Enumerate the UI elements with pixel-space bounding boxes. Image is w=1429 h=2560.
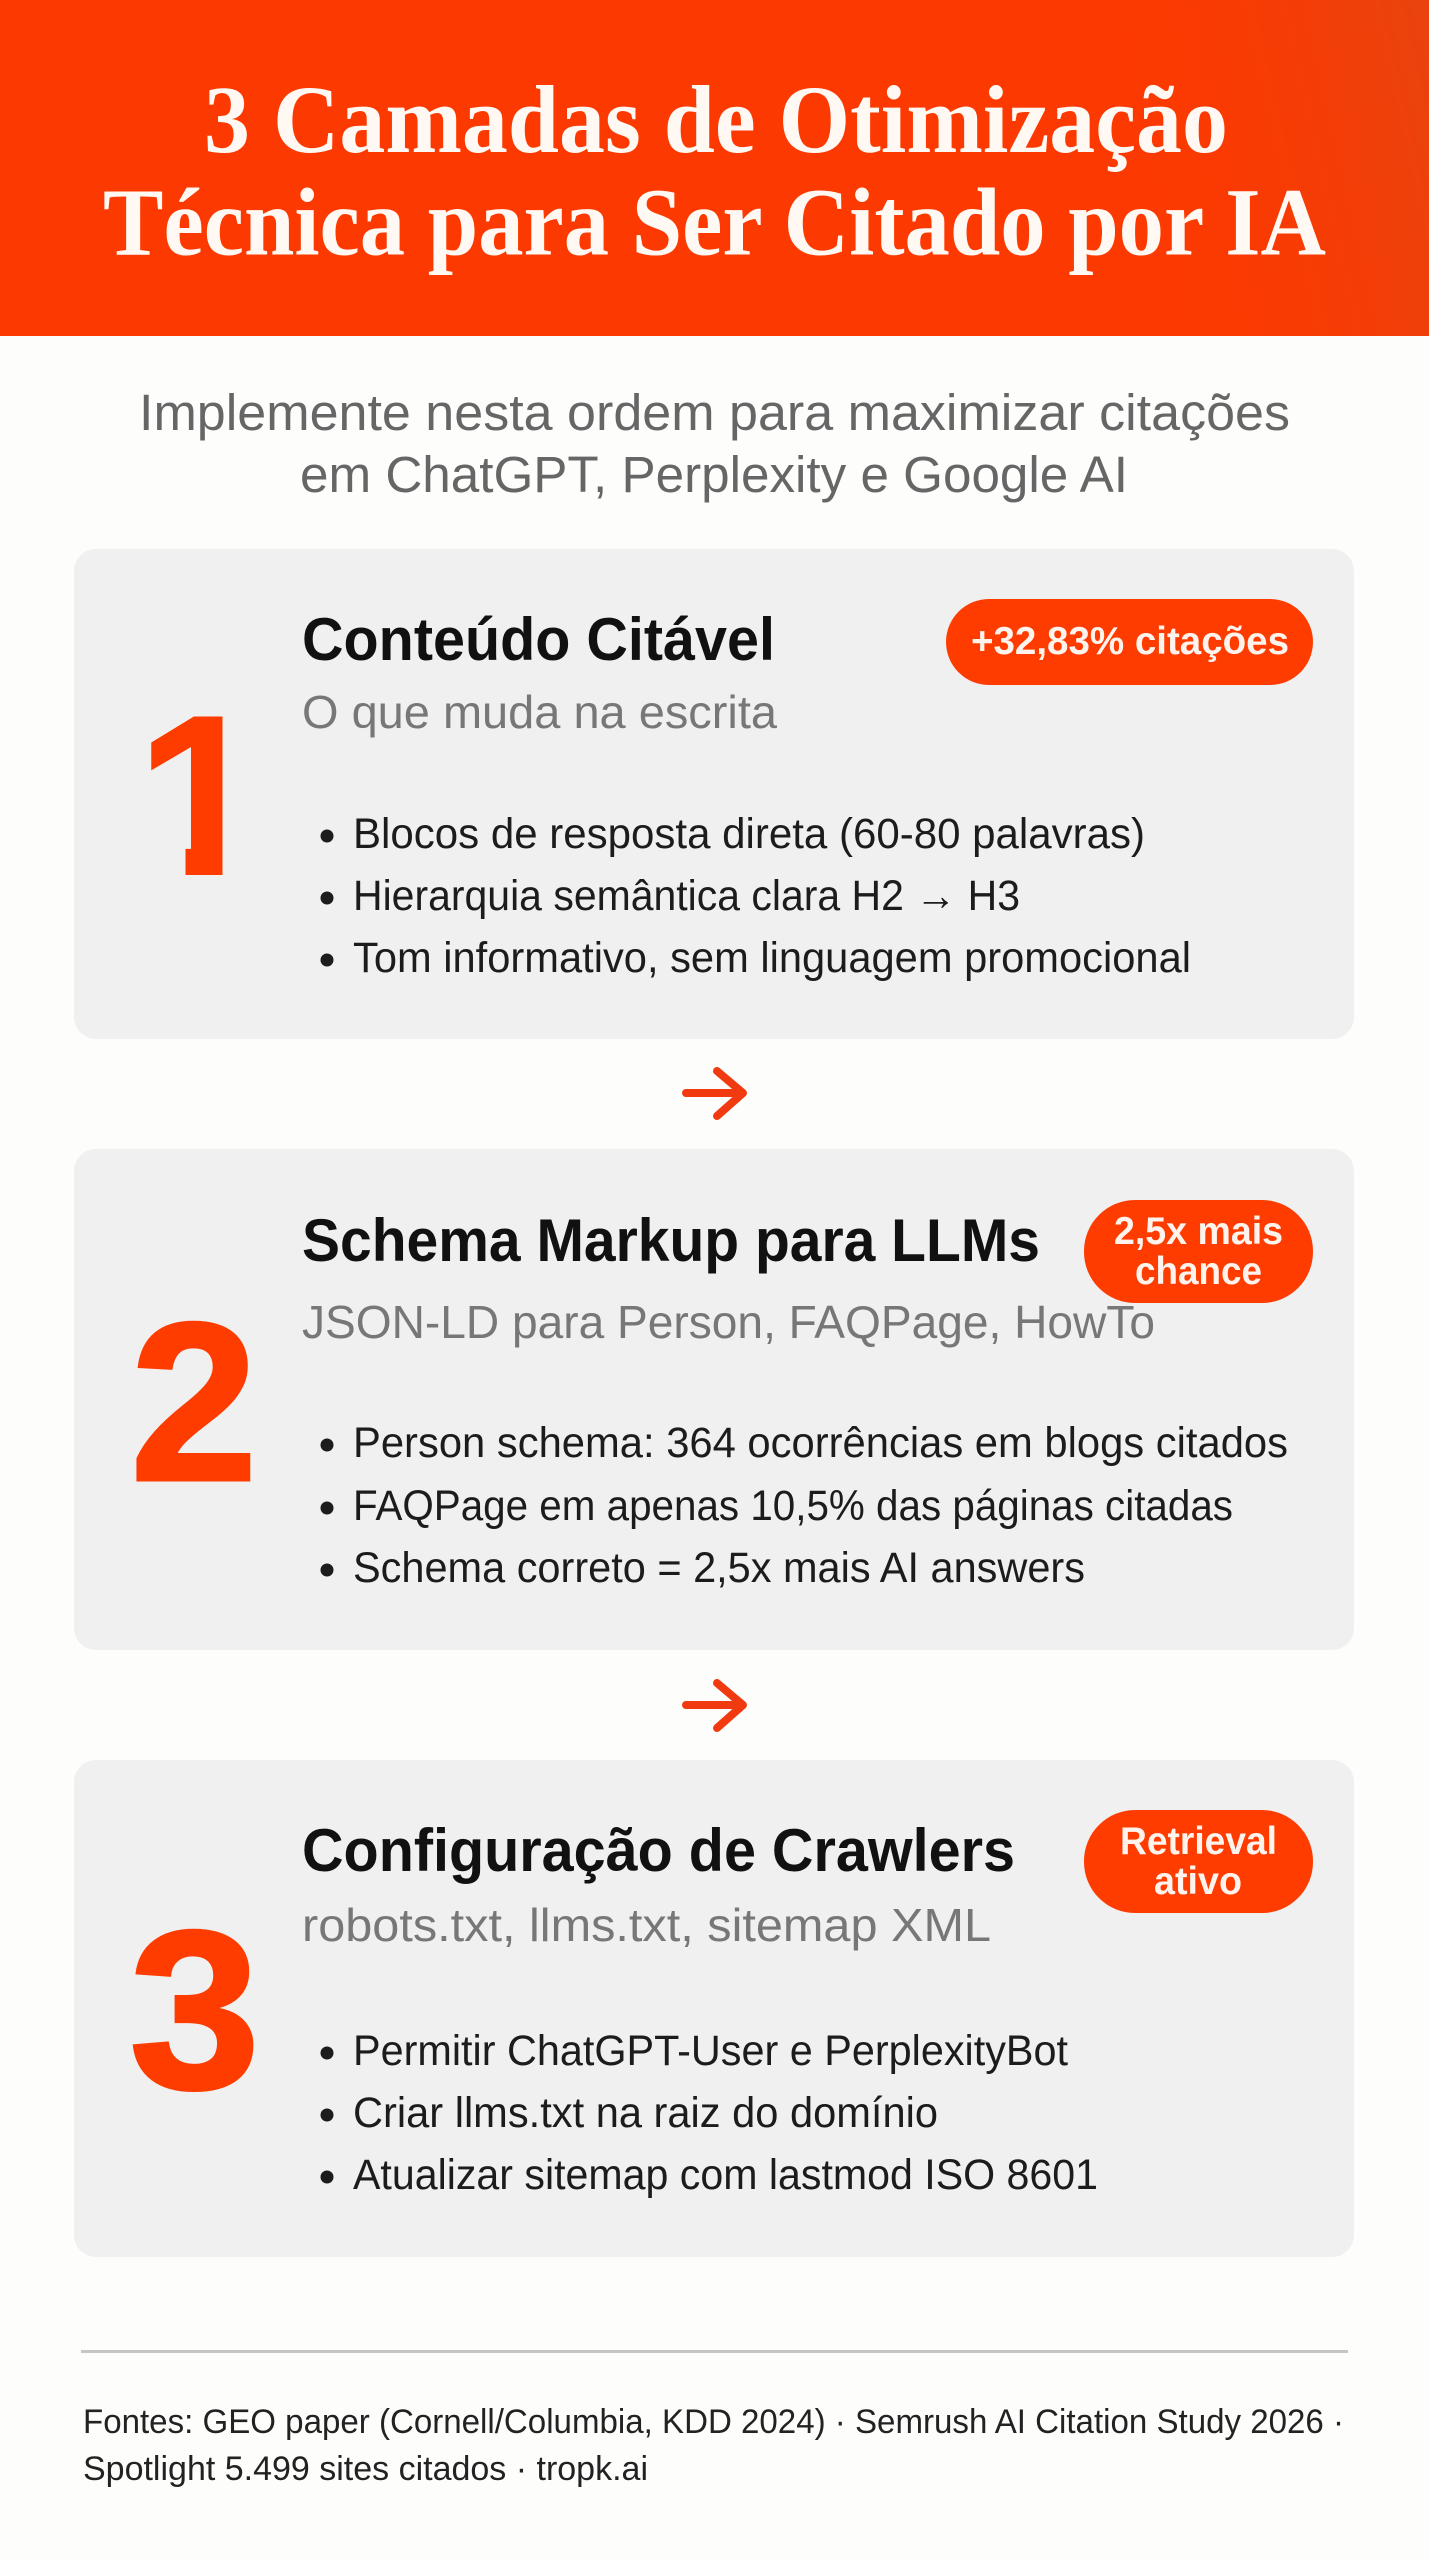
title [103,66,1326,276]
subheading: O que muda na escrita: O que muda na escrita [302,686,777,738]
badge: 2,5x mais chance: 2,5x mais [1114,1210,1283,1253]
heading: Conteúdo Citável: Conteúdo Citável [302,606,775,673]
header banner with title [0,0,1429,336]
arrow 2 to 3 [686,1683,743,1728]
subtitle [139,384,1290,503]
badge: 2,5x mais chance: chance [1135,1250,1262,1293]
subtitle: Implemente nesta ordem para maximizar citações [139,384,1290,441]
panel: card 3 Configuração de Crawlers [74,1760,1354,2257]
badge: +32,83% citações [946,599,1313,685]
subheading: robots.txt: robots.txt, llms.txt, sitemap XML [302,1899,991,1951]
bullet list: Tom informativo, sem linguagem promocional [353,934,1191,982]
badge: Retrieval ativo [1084,1810,1313,1913]
bullet list: Schema correto = 2,5x mais AI answers [353,1544,1085,1592]
badge: Retrieval ativo: ativo [1154,1860,1242,1903]
title: Técnica para Ser Citado por IA [103,168,1326,276]
panel: card 1 Conteúdo Citável [74,549,1354,1039]
footer sources: Spotlight 5.499 sites citados · tropk.ai [83,2450,648,2488]
bullet list [320,1419,1288,1592]
footer sources: Fontes: GEO paper (Cornell/Columbia, KDD 2024) · Semrush AI Citation Study 2026 · [83,2403,1344,2441]
bullet list: Atualizar sitemap com lastmod ISO 8601 [353,2151,1098,2199]
badge: +32,83% citações: +32,83% citações [971,620,1289,663]
panel: card 2 Schema Markup para LLMs [74,1149,1354,1650]
number 3: 3 [129,1884,260,2136]
badge: Retrieval ativo: Retrieval [1120,1820,1277,1863]
footer sources [83,2403,1344,2488]
arrow 1 to 2 [686,1071,743,1116]
bullet list: Hierarquia semântica clara H2 → H3 [353,872,1020,920]
bullet list: FAQPage em apenas 10,5% das páginas citadas [353,1482,1233,1530]
bullet list: Blocos de resposta direta (60-80 palavras) [353,810,1145,858]
heading: Configuração de Crawlers: Configuração de Crawlers [302,1817,1015,1884]
bullet list: Criar llms.txt na raiz do domínio [353,2089,938,2137]
number 1: 1 [136,670,270,922]
subtitle: em ChatGPT, Perplexity e Google AI [300,446,1128,503]
subheading: JSON-LD: JSON-LD para Person, FAQPage, HowTo [302,1296,1155,1348]
bullet list [320,810,1191,982]
title: 3 Camadas de Otimização [204,66,1228,173]
bullet list [320,2027,1098,2199]
number 2: 2 [130,1277,258,1529]
bullet list: Person schema: 364 ocorrências em blogs citados [353,1419,1288,1467]
bullet list: Permitir ChatGPT-User e PerplexityBot [353,2027,1068,2075]
badge: 2,5x mais chance [1084,1200,1313,1303]
heading: Schema Markup para LLMs: Schema Markup para LLMs [302,1207,1040,1274]
